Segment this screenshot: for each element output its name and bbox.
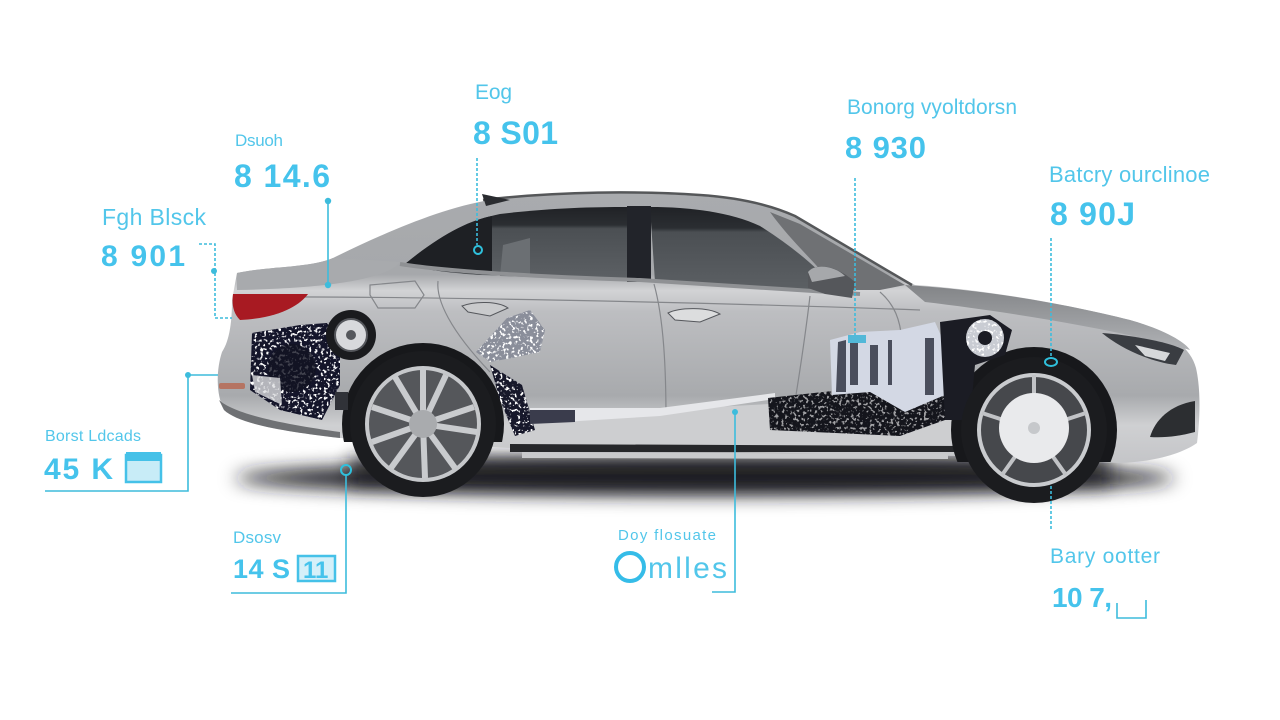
callout: Bonorg vyoltdorsn: 8 930 [845, 130, 926, 165]
callout: Dsosv: 14 S [233, 554, 290, 584]
callout: Fgh Blsck: Fgh Blsck [102, 204, 206, 230]
callout: Eog: Eog [475, 81, 512, 104]
rear cutaway: engine [250, 322, 348, 420]
callout: Eog: 8 S01 [473, 115, 558, 151]
front bumper vent [1150, 401, 1195, 437]
rear suspension [476, 310, 545, 436]
callout: Dsuoh [234, 131, 331, 288]
front wheel [961, 357, 1107, 503]
callout: Borst Ldcads [44, 372, 218, 491]
tail light [233, 294, 308, 320]
icon: ring [616, 553, 644, 581]
sill [510, 404, 960, 459]
callout: Doy flosuate: mlles [648, 552, 727, 585]
callout: Dsuoh: Dsuoh [235, 131, 283, 150]
car body [218, 193, 1199, 463]
drive shaft [530, 393, 775, 424]
front drive unit [940, 315, 1012, 420]
callout: Batcry ourclinoe [1045, 162, 1210, 530]
roof rim [483, 192, 912, 285]
icon: battery [126, 452, 161, 482]
callout: Dsosv [231, 465, 351, 593]
headlight [1102, 333, 1184, 365]
callout: Batcry ourclinoe: 8 90J [1050, 196, 1135, 232]
callout: Eog [473, 81, 558, 254]
callout: Borst Ldcads: 45 K [44, 453, 113, 486]
callout: Bonorg vyoltdorsn: Bonorg vyoltdorsn [847, 96, 1017, 119]
callout: Doy flosuate [616, 409, 738, 592]
callout: Doy flosuate: Doy flosuate [618, 527, 716, 544]
callout: Fgh Blsck: 8 901 [101, 240, 185, 273]
callout: Dsosv: Dsosv [233, 528, 282, 547]
callout: Bary ootter: Bary ootter [1050, 545, 1160, 568]
callout: Fgh Blsck [101, 204, 232, 318]
car cutaway illustration [218, 192, 1199, 513]
callout: Bonorg vyoltdorsn [845, 96, 1017, 335]
rear bumper reflector [219, 383, 245, 389]
callout: Borst Ldcads: Borst Ldcads [45, 428, 141, 445]
callout: Dsuoh: 8 14.6 [234, 158, 330, 194]
front motor block [830, 322, 945, 412]
car ground shadow [235, 458, 1175, 495]
front battery pack [768, 388, 945, 436]
hood panel [905, 285, 1190, 350]
rear deck panel [237, 258, 400, 290]
callout: Bary ootter [1050, 545, 1160, 618]
icon: battery box: 11 [303, 557, 328, 584]
door lines and handles [240, 281, 920, 420]
rear small wheel [326, 310, 376, 360]
wheel arches [342, 343, 504, 442]
callout: Batcry ourclinoe: Batcry ourclinoe [1049, 162, 1210, 187]
mirror [808, 266, 855, 298]
windows [400, 206, 905, 294]
callout: Bary ootter: 10 7, [1052, 582, 1112, 613]
rear wheel [350, 351, 496, 497]
